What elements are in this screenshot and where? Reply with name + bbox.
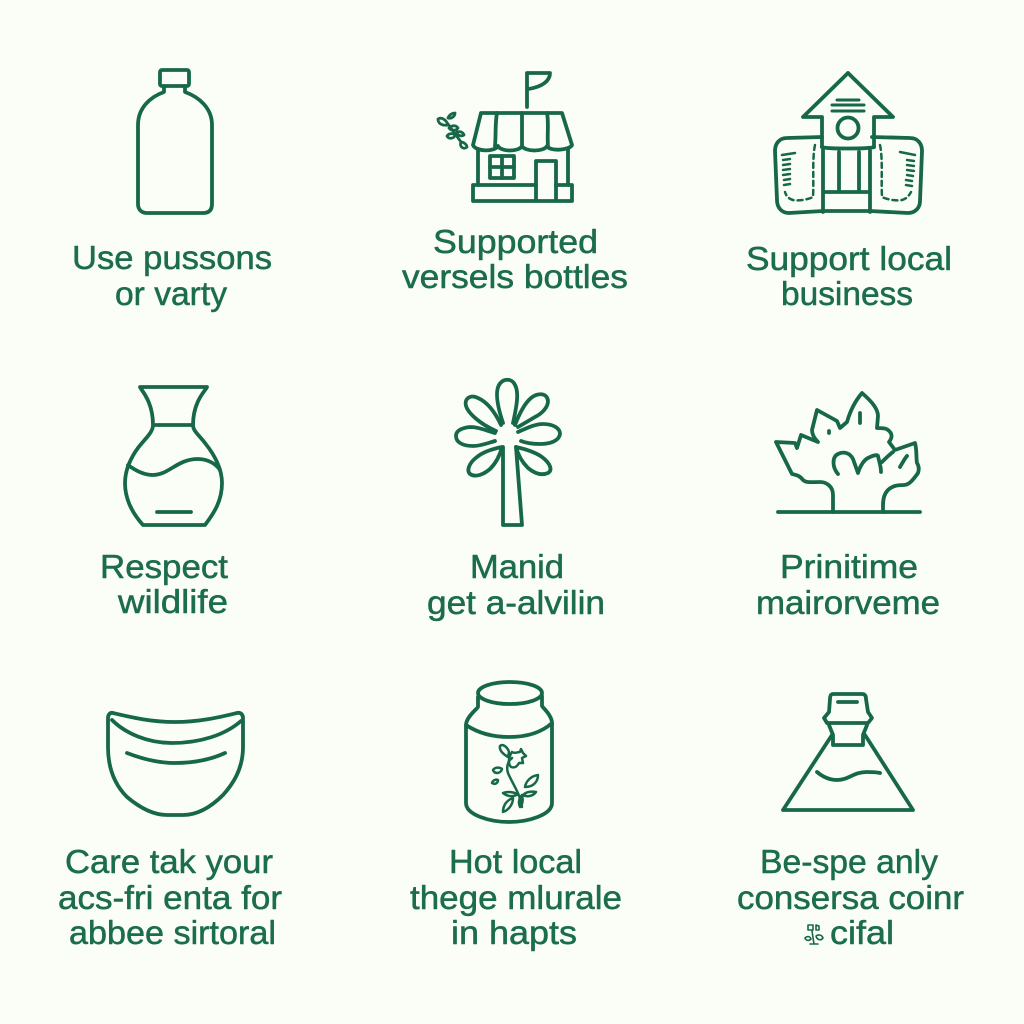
text: hot local: in hapts bbox=[451, 914, 577, 951]
text: care tak your: abbee sirtoral bbox=[69, 914, 276, 951]
text: manid: get a-alvilin bbox=[427, 584, 605, 621]
text: prinitime: Prinitime bbox=[780, 548, 918, 585]
text: hot local: thege mlurale bbox=[410, 879, 622, 916]
icon: bowl bbox=[108, 713, 243, 815]
text: care tak your bbox=[58, 843, 282, 951]
text: use pussons: Use pussons bbox=[72, 239, 272, 276]
icon: jar with herb bbox=[466, 682, 552, 822]
text: supported vessels: versels bottles bbox=[402, 258, 628, 295]
text: support local business: Support local bbox=[746, 240, 952, 277]
text: supported vessels bbox=[402, 223, 628, 295]
text: manid bbox=[427, 548, 605, 621]
text: respect wildlife: Respect bbox=[100, 548, 228, 585]
text: prinitime: mairorveme bbox=[756, 584, 940, 621]
icon: small sprig bbox=[805, 925, 823, 944]
text: use pussons: or varty bbox=[115, 275, 227, 312]
text: be-spe any bbox=[737, 843, 964, 951]
icon: leaf sprig bbox=[438, 113, 467, 148]
text: respect wildlife: wildlife bbox=[117, 583, 228, 620]
text: hot local: Hot local bbox=[449, 843, 582, 880]
icon: building with banknote bbox=[775, 73, 922, 213]
icon: flask bbox=[783, 694, 913, 810]
text: prinitime bbox=[756, 548, 940, 621]
text: respect wildlife bbox=[100, 548, 228, 620]
text: be-spe any: consersa coinr bbox=[737, 879, 964, 916]
icon: shop bbox=[438, 73, 572, 201]
text: care tak your: acs-fri enta for bbox=[58, 879, 282, 916]
text: manid: Manid bbox=[470, 548, 564, 585]
text: be-spe any: cifal bbox=[830, 914, 894, 951]
text: care tak your: Care tak your bbox=[65, 843, 273, 880]
text: be-spe any: Be-spe anly bbox=[760, 843, 939, 880]
icon: palm bbox=[456, 380, 560, 525]
text: hot local bbox=[410, 843, 622, 951]
icon: tree bush bbox=[776, 393, 920, 512]
text: supported vessels: Supported bbox=[433, 223, 598, 260]
icon: bottle bbox=[138, 70, 212, 213]
text: support local business bbox=[746, 240, 952, 312]
icon: vase bbox=[125, 387, 222, 525]
text: use pussons bbox=[72, 239, 272, 312]
text: support local business: business bbox=[781, 275, 913, 312]
